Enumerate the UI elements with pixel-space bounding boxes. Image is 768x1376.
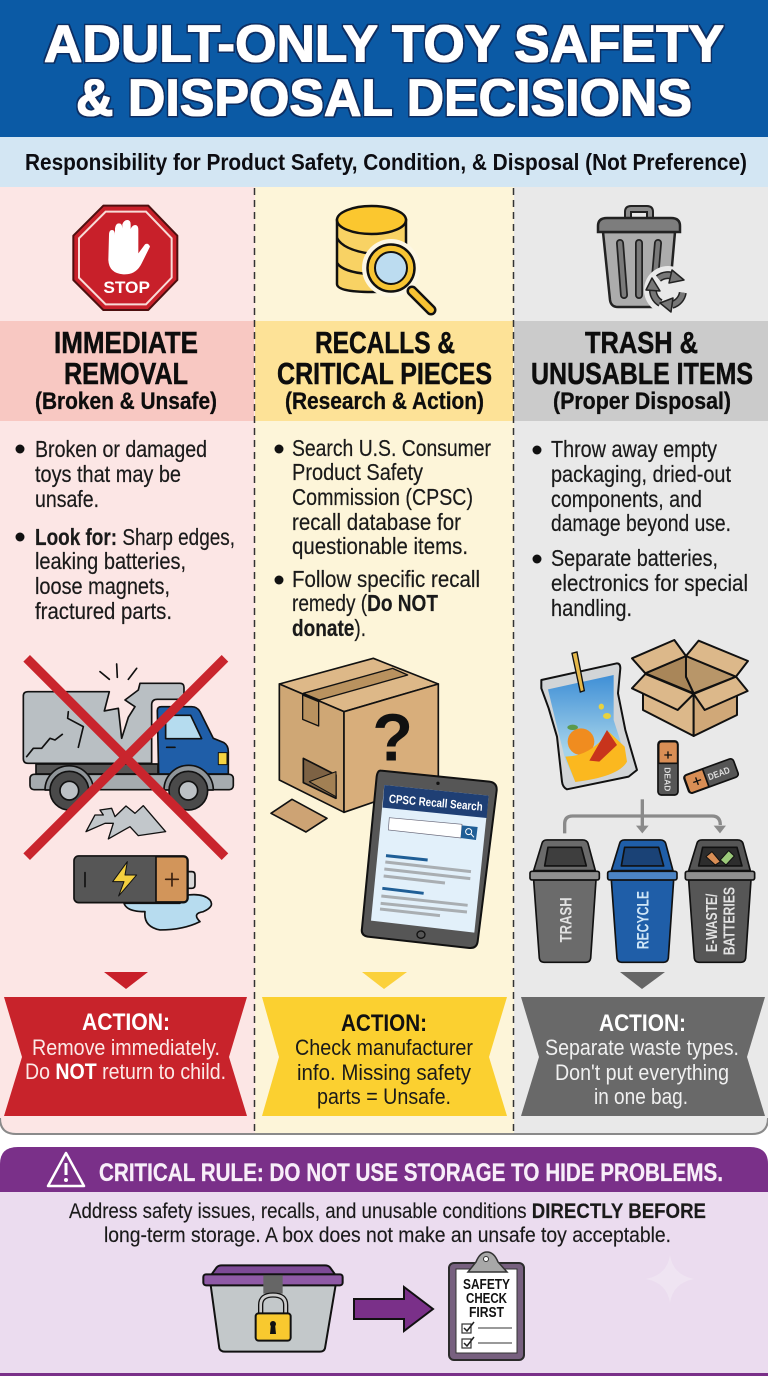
truck <box>23 664 233 839</box>
illustration: waste items and sorting bins: RECYCLE <box>634 891 653 949</box>
tablet <box>362 771 497 948</box>
bullet list: leaking batteries, <box>35 548 186 574</box>
sparkle <box>646 1255 694 1303</box>
bullet list: components, and <box>551 486 702 512</box>
action banner: Remove immediately. <box>32 1035 220 1060</box>
action banner: info. Missing safety <box>297 1060 471 1085</box>
trash bin <box>530 840 599 962</box>
clipboard: safety check first: FIRST <box>469 1305 504 1321</box>
action banner: ACTION: <box>82 1009 170 1036</box>
panel: recalls and critical pieces <box>255 187 514 1134</box>
action banner: Do NOT return to child. <box>25 1059 226 1084</box>
panel: trash and unusable items <box>514 187 768 1134</box>
illustration: broken truck and leaking battery crossed out <box>23 658 233 930</box>
heading band: (Broken & Unsafe) <box>35 388 217 415</box>
bullet list: recall database for <box>292 509 461 535</box>
critical rule header <box>0 1147 768 1192</box>
action banner: Separate waste types. <box>545 1035 739 1060</box>
heading band <box>0 321 254 421</box>
rule text: long-term storage. A box does not make an unsafe toy acceptable. <box>104 1223 671 1247</box>
heading band: (Research & Action) <box>285 388 484 415</box>
bullet list <box>274 435 491 641</box>
illustration: waste items and sorting bins: BATTERIES <box>722 887 739 955</box>
action banner: ACTION: <box>599 1010 686 1037</box>
bullet list: Broken or damaged <box>35 436 207 462</box>
sorting arrows <box>565 799 726 833</box>
heading band: REMOVAL <box>64 356 188 391</box>
bullet list: packaging, dried-out <box>551 461 731 487</box>
bullet list: questionable items. <box>292 533 468 559</box>
rule text <box>69 1199 706 1247</box>
clipboard: safety check first: SAFETY <box>463 1277 510 1293</box>
heading band: CRITICAL PIECES <box>277 356 492 391</box>
arrow <box>362 972 407 989</box>
bullet list: Throw away empty <box>551 436 717 462</box>
bullet list <box>532 436 748 621</box>
subtitle strip <box>0 137 768 188</box>
bullet list: Search U.S. Consumer <box>292 435 491 461</box>
bullet list: unsafe. <box>35 486 99 512</box>
heading band: TRASH & <box>585 325 698 360</box>
icon: stop sign: STOP <box>103 278 150 297</box>
bullet list: toys that may be <box>35 461 181 487</box>
rule text: Address safety issues, recalls, and unusable conditions DIRECTLY BEFORE <box>69 1199 706 1223</box>
heading band: RECALLS & <box>315 325 455 360</box>
icon: stop sign <box>73 206 177 310</box>
dead batteries: DEAD <box>663 767 673 791</box>
red cross <box>27 658 225 857</box>
bullet list: Commission (CPSC) <box>292 484 473 510</box>
tablet: CPSC Recall Search <box>388 792 483 814</box>
arrow <box>104 972 148 989</box>
illustration: waste items and sorting bins <box>530 640 755 962</box>
icon: trash can with recycle symbol <box>598 206 692 314</box>
title banner <box>0 0 768 137</box>
clipboard: safety check first: CHECK <box>466 1291 507 1307</box>
battery <box>74 856 211 930</box>
bullet list: donate). <box>292 615 366 641</box>
bullet list: damage beyond use. <box>551 510 731 536</box>
cardboard box <box>271 658 438 832</box>
action banner: ACTION: <box>341 1010 427 1037</box>
question mark: ? <box>372 702 413 776</box>
heading band <box>514 321 768 421</box>
action banner <box>521 997 765 1116</box>
action banner: Don't put everything <box>555 1060 729 1085</box>
bullet list: remedy (Do NOT <box>292 590 439 616</box>
icon: database with magnifier <box>337 206 431 310</box>
juice pouch <box>541 652 637 789</box>
bullet list: loose magnets, <box>35 573 170 599</box>
action banner <box>262 997 507 1116</box>
action banner: Check manufacturer <box>295 1035 473 1060</box>
heading band: IMMEDIATE <box>54 325 198 360</box>
e-waste bin <box>685 840 755 962</box>
dead batteries <box>658 741 739 795</box>
bullet list: Follow specific recall <box>292 566 480 592</box>
panel: immediate removal <box>0 187 255 1134</box>
bullet list: fractured parts. <box>35 598 172 624</box>
illustration: waste items and sorting bins: E-WASTE/ <box>704 893 721 952</box>
action banner: in one bag. <box>594 1084 688 1109</box>
arrow <box>354 1287 433 1331</box>
bullet list: Look for: Sharp edges, <box>35 524 235 550</box>
panel: critical rule <box>0 1147 768 1376</box>
arrow <box>620 972 665 989</box>
illustration: waste items and sorting bins: TRASH <box>556 897 575 942</box>
dead batteries: DEAD <box>707 765 732 782</box>
illustration: locked storage bin <box>203 1265 343 1352</box>
bullet list: Separate batteries, <box>551 545 718 571</box>
title banner: & DISPOSAL DECISIONS <box>76 70 692 128</box>
heading band <box>255 321 513 421</box>
clipboard: safety check first <box>449 1252 524 1360</box>
action banner: parts = Unsafe. <box>317 1084 451 1109</box>
action banner <box>4 997 247 1116</box>
bullet list <box>16 436 235 624</box>
title banner: ADULT-ONLY TOY SAFETY <box>44 16 724 74</box>
illustration: box and tablet <box>271 658 497 948</box>
open box <box>632 640 748 736</box>
bullet list: handling. <box>551 595 632 621</box>
recycle bin <box>608 840 677 962</box>
heading band: (Proper Disposal) <box>553 388 731 415</box>
bullet list: Product Safety <box>292 459 423 485</box>
